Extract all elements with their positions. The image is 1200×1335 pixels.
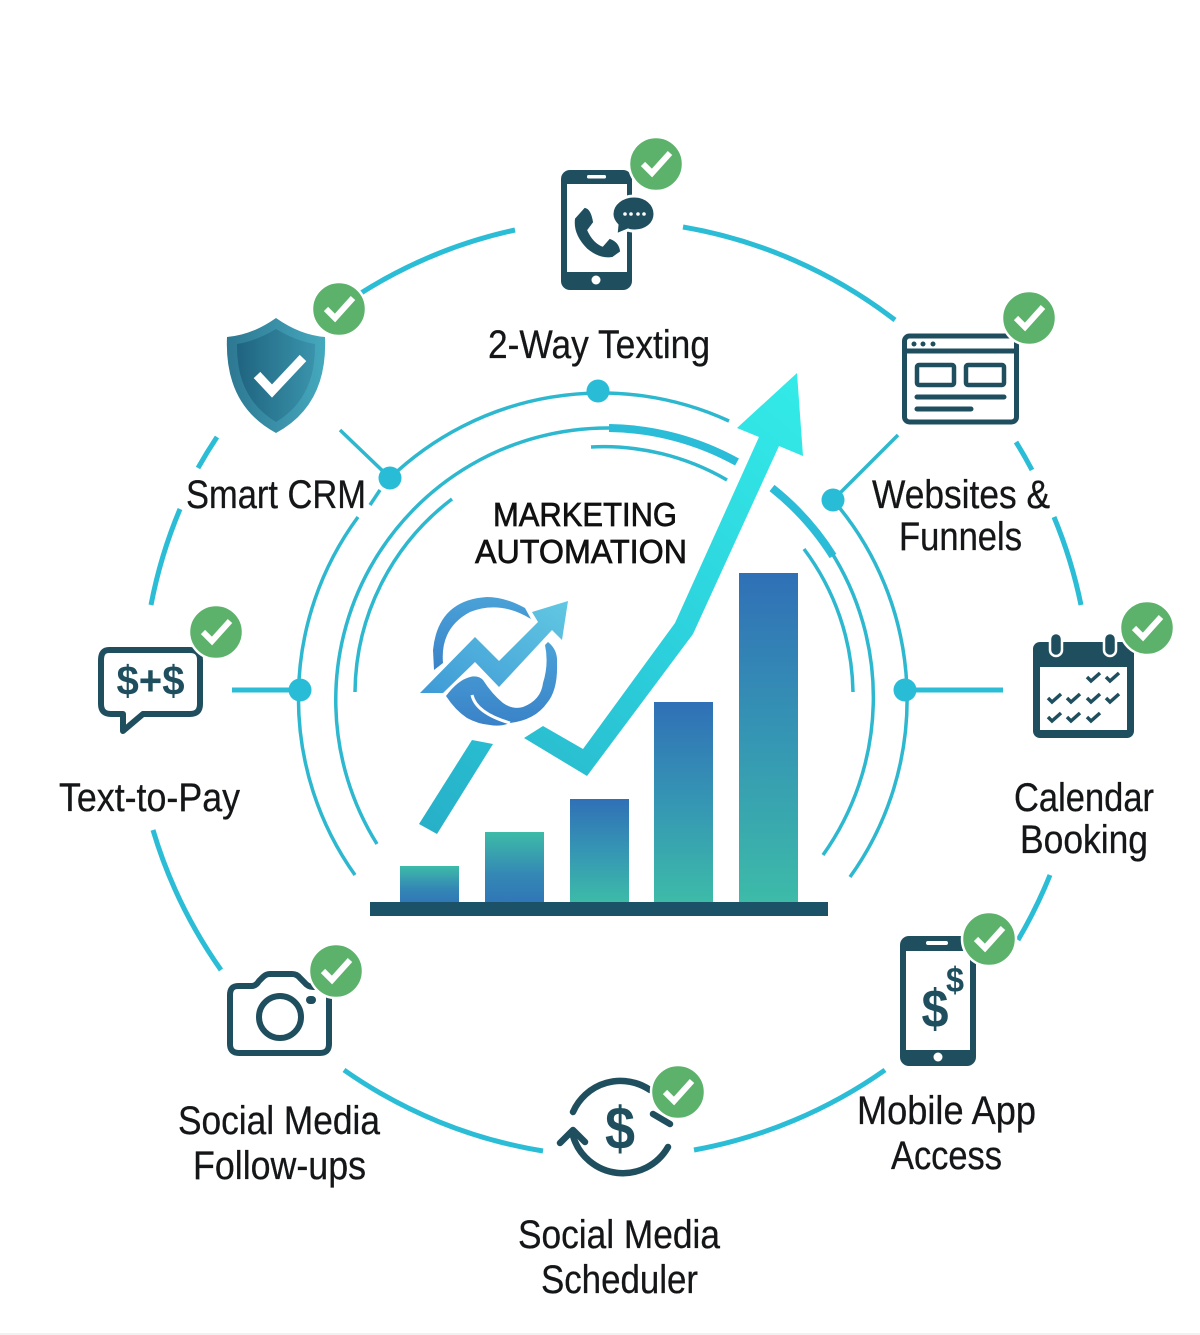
icon: phone with call and chat <box>561 170 655 290</box>
center title: MARKETING <box>493 496 677 533</box>
icon: camera <box>230 974 329 1053</box>
label <box>857 1089 1036 1178</box>
icon: chat bubble with dollars: $+$ <box>116 657 184 704</box>
icon: phone with dollars: $ <box>946 961 964 1000</box>
item: Social Media Scheduler <box>518 1065 721 1302</box>
label: 2-Way Texting <box>488 323 710 367</box>
item: Smart CRM <box>186 282 366 517</box>
label: Social Media <box>518 1213 721 1257</box>
check badge <box>629 137 683 191</box>
label <box>518 1213 721 1302</box>
icon: browser window <box>904 336 1018 422</box>
check badge <box>309 944 363 998</box>
item: 2-Way Texting <box>488 137 710 367</box>
icon: calendar <box>1033 633 1134 738</box>
label: Social Media <box>178 1099 381 1143</box>
label <box>872 473 1050 559</box>
label: Booking <box>1020 818 1148 862</box>
check badge <box>1002 291 1056 345</box>
check badge <box>651 1065 705 1119</box>
check badge <box>962 912 1016 966</box>
label: Smart CRM <box>186 473 366 517</box>
bar chart <box>370 573 828 916</box>
inner rings and connectors <box>232 393 1003 877</box>
icon: circular arrows with dollar <box>560 1081 670 1173</box>
label <box>1014 776 1154 862</box>
label: Access <box>891 1134 1002 1178</box>
item: Text-to-Pay <box>59 605 243 820</box>
center title: AUTOMATION <box>475 533 687 570</box>
item: Social Media Follow-ups <box>178 944 381 1188</box>
icon: shield with check <box>227 318 325 433</box>
check badge <box>1120 601 1174 655</box>
label: Follow-ups <box>193 1144 366 1188</box>
label: Text-to-Pay <box>59 776 240 820</box>
check badge <box>189 605 243 659</box>
ring nodes <box>288 380 916 702</box>
icon: circular arrows with dollar: $ <box>605 1095 635 1162</box>
growth arrow <box>419 373 803 834</box>
label: Websites & <box>872 473 1050 517</box>
label: Scheduler <box>541 1258 698 1302</box>
icon: phone with dollars <box>900 936 976 1066</box>
item: Mobile App Access <box>857 912 1036 1178</box>
label: Mobile App <box>857 1089 1036 1133</box>
label: Calendar <box>1014 776 1154 820</box>
outer ring segments <box>151 227 1081 1151</box>
center logo <box>420 597 568 726</box>
item: Calendar Booking <box>1014 601 1174 862</box>
label: Funnels <box>899 515 1022 559</box>
center title <box>475 496 687 570</box>
check badge <box>312 282 366 336</box>
item: Websites & Funnels <box>872 291 1056 559</box>
label <box>178 1099 381 1188</box>
icon: chat bubble with dollars <box>101 650 200 731</box>
icon: phone with dollars: $ <box>922 979 948 1039</box>
